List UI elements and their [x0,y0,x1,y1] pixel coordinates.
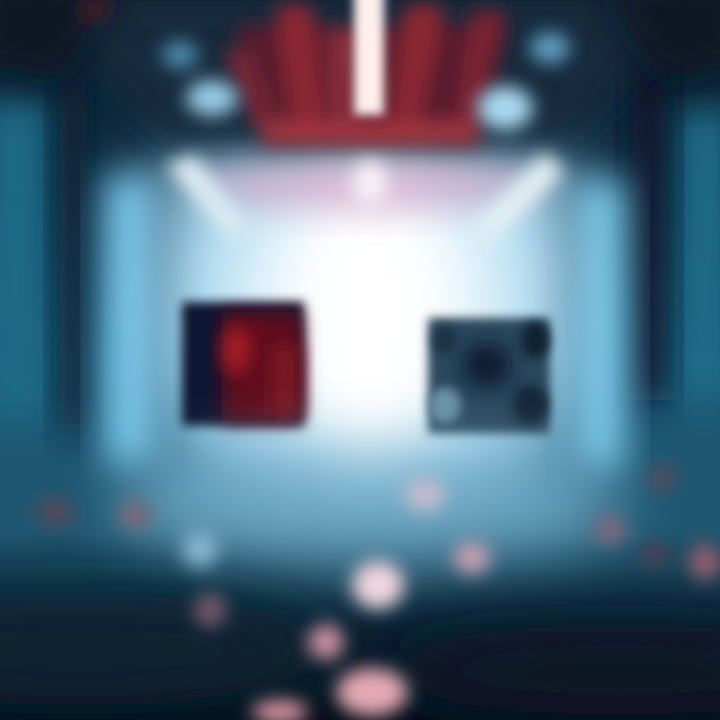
right dark panel [428,318,550,434]
ceiling blue lights [162,32,570,130]
central light glow [150,150,580,500]
ceiling [0,0,720,204]
left red panel [182,302,304,426]
diagonal light beams [165,152,565,245]
ceiling white light [354,0,384,115]
right wall panels [575,50,720,470]
pink petals on floor [37,466,720,720]
left wall panels [0,60,155,465]
red fan ceiling [222,5,510,146]
floor [0,445,720,715]
